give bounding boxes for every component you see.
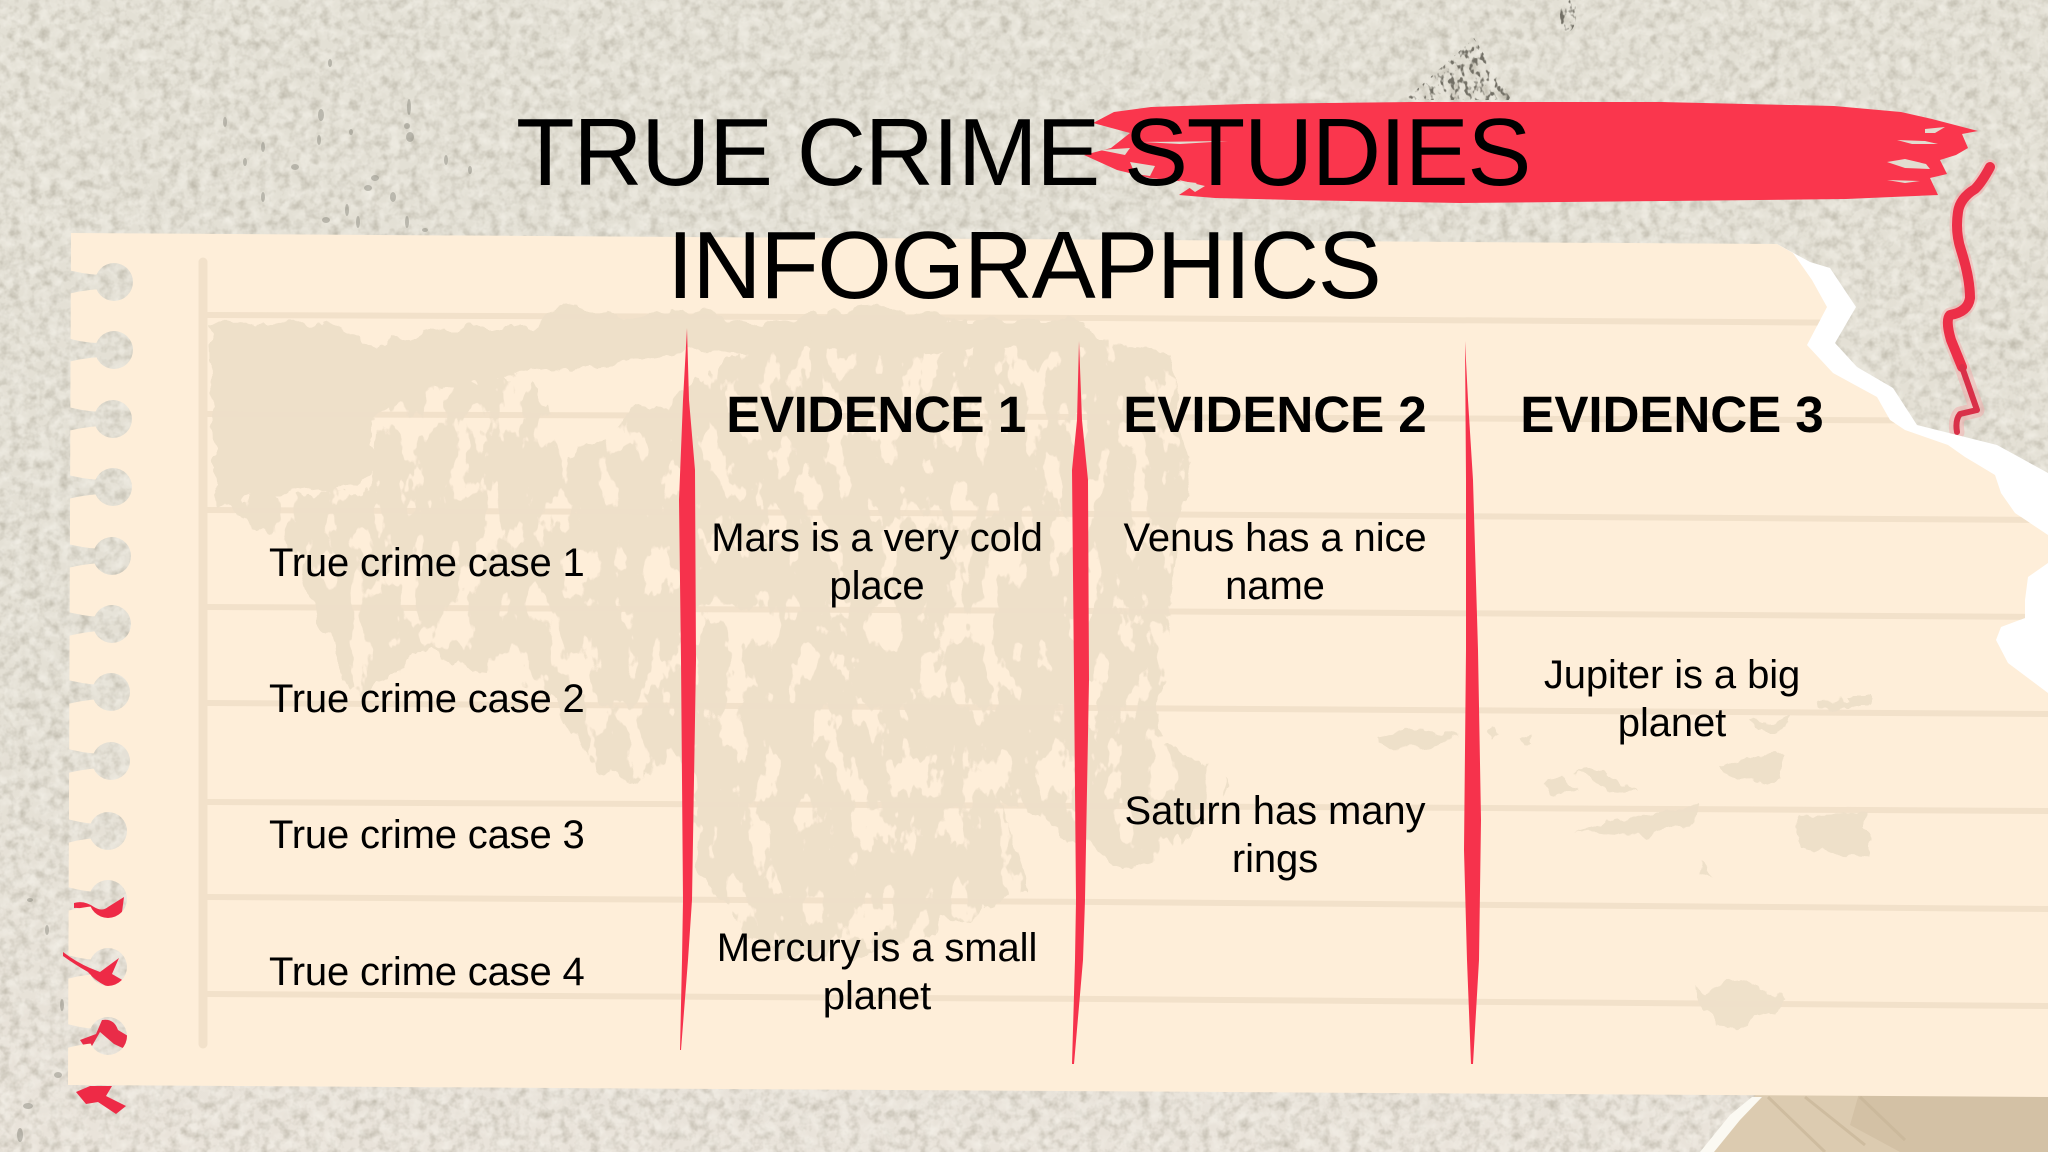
column heading: evidence 2: EVIDENCE 2: [1123, 386, 1427, 443]
red brush stroke behind title: [1084, 102, 1978, 203]
cell: Jupiter evidence: [1544, 653, 1800, 745]
cell: Saturn evidence: [1125, 789, 1426, 881]
cell: Jupiter evidence: planet: [1618, 701, 1726, 745]
cell: Jupiter evidence: Jupiter is a big: [1544, 653, 1800, 697]
red pencil squiggle: [1948, 167, 1990, 432]
cell: Saturn evidence: Saturn has many: [1125, 789, 1426, 833]
ruled lines: [203, 262, 2048, 1044]
red divider 3: [1464, 341, 1481, 1064]
red divider 2: [1072, 341, 1089, 1064]
cell: Mercury evidence: planet: [823, 974, 931, 1018]
stains: [210, 305, 1868, 1028]
cell: Mars evidence: place: [829, 564, 925, 608]
row label: case 4: True crime case 4: [269, 950, 585, 994]
cell: Venus evidence: Venus has a nice: [1123, 516, 1427, 560]
cell: Saturn evidence: rings: [1232, 837, 1318, 881]
cell: Mercury evidence: [717, 926, 1037, 1018]
cell: Mars evidence: [711, 516, 1043, 608]
torn white paper backing: [1760, 244, 2048, 710]
red divider 1: [679, 328, 696, 1050]
red pencil marks behind binding holes: [63, 897, 128, 1114]
title: [516, 99, 1530, 319]
cell: Venus evidence: [1123, 516, 1427, 608]
column heading: evidence 1: EVIDENCE 1: [726, 386, 1026, 443]
cell: Mercury evidence: Mercury is a small: [717, 926, 1037, 970]
title: INFOGRAPHICS: [667, 212, 1380, 319]
cell: Mars evidence: Mars is a very cold: [711, 516, 1043, 560]
row label: case 3: True crime case 3: [269, 813, 585, 857]
title: TRUE CRIME STUDIES: [516, 99, 1530, 206]
row label: case 2: True crime case 2: [269, 677, 585, 721]
cell: Venus evidence: name: [1225, 564, 1325, 608]
row label: case 1: True crime case 1: [269, 541, 585, 585]
panel: notebook paper: [68, 233, 2048, 1097]
brown torn paper corner: [1700, 1090, 2048, 1152]
column heading: evidence 3: EVIDENCE 3: [1520, 386, 1824, 443]
